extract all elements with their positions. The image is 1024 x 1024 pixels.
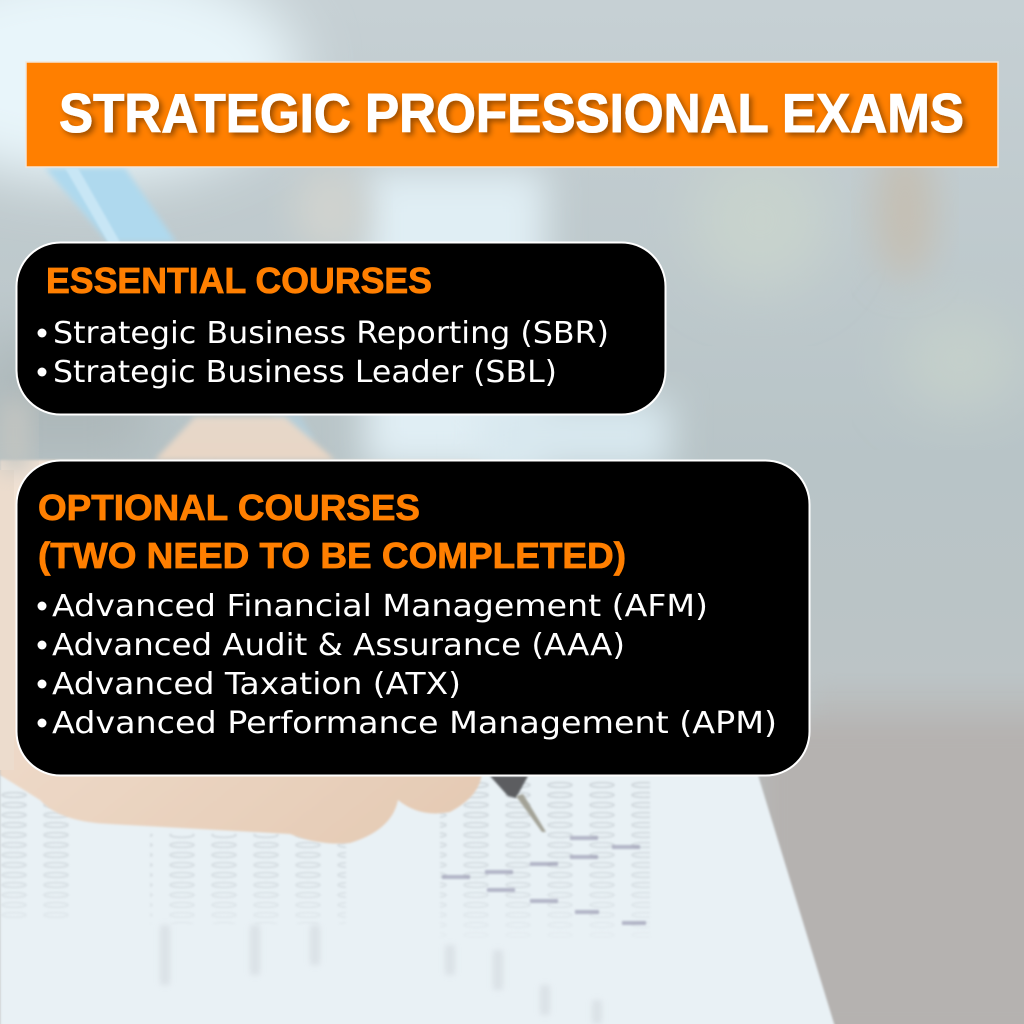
pen barrel bbox=[45, 168, 176, 242]
hand bbox=[0, 460, 482, 844]
answer sheet marks bbox=[1, 782, 650, 906]
heading: optional courses bbox=[38, 487, 626, 576]
paper bbox=[0, 775, 836, 1024]
pen tip bbox=[490, 776, 528, 798]
filled answer bubbles bbox=[442, 836, 646, 925]
course list: optional bbox=[38, 589, 777, 741]
panel: essential courses bbox=[16, 242, 666, 414]
course list: essential: Strategic Business Leader (SBL) bbox=[53, 355, 557, 390]
course list: essential: Strategic Business Reporting (SBR) bbox=[53, 316, 609, 351]
course list: optional: Advanced Financial Management (AFM) bbox=[52, 589, 708, 624]
panel: optional courses bbox=[16, 460, 810, 776]
title text: STRATEGIC PROFESSIONAL EXAMS bbox=[59, 82, 964, 144]
course list: optional: Advanced Performance Management (APM) bbox=[52, 706, 777, 741]
blurred marks lower part bbox=[160, 925, 602, 1024]
heading: optional courses: OPTIONAL COURSES bbox=[38, 487, 420, 528]
course list: optional: Advanced Audit & Assurance (AAA) bbox=[52, 628, 625, 663]
heading: essential courses: ESSENTIAL COURSES bbox=[46, 260, 432, 301]
title banner bbox=[26, 62, 998, 167]
course list: optional: Advanced Taxation (ATX) bbox=[52, 667, 461, 702]
course list: essential bbox=[38, 316, 609, 390]
heading: optional courses: (TWO NEED TO BE COMPLETED) bbox=[38, 535, 626, 576]
